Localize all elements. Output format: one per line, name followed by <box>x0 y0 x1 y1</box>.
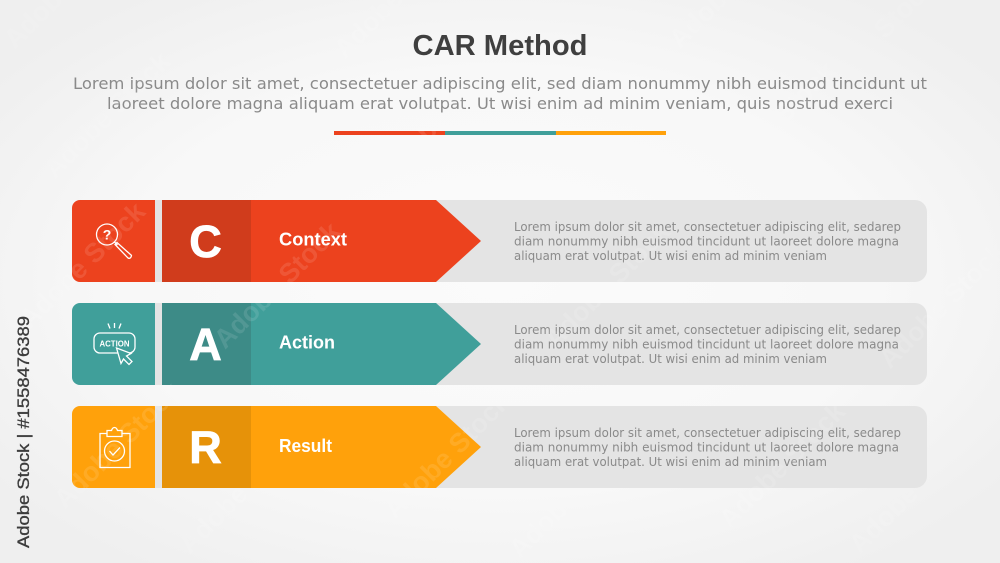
icon: action button with cursor: ACTION <box>100 340 130 348</box>
description: context: aliquam erat volutpat. Ut wisi enim ad minim veniam <box>514 249 827 263</box>
watermark pattern: Adobe <box>503 484 584 563</box>
stock id sidebar text: Adobe Stock | #1558476389 <box>14 316 33 548</box>
letter C: C <box>189 216 222 267</box>
icon: magnifier with question mark: ? <box>103 226 111 242</box>
label: Action: Action <box>279 332 335 352</box>
description background <box>72 303 927 385</box>
label: Context: Context <box>279 230 347 250</box>
panel: action row <box>72 303 927 385</box>
description: context <box>514 220 901 263</box>
watermark pattern: Adobe Stock <box>703 56 842 194</box>
watermark pattern: Adobe Stock <box>373 46 512 184</box>
title: CAR Method <box>412 30 588 62</box>
description background <box>72 200 927 282</box>
icon: action button with cursor <box>94 323 135 364</box>
panel: context row <box>72 200 927 282</box>
letter R: R <box>189 422 222 473</box>
watermark pattern: Adobe Stock <box>538 216 677 354</box>
description background <box>72 406 927 488</box>
icon: clipboard with check <box>100 428 130 468</box>
letter block: A <box>162 303 251 385</box>
subtitle text: Lorem ipsum dolor sit amet, consectetuer adipiscing elit, sed diam nonummy nibh euismod tincidunt ut <box>73 74 927 93</box>
watermark pattern: Adobe <box>843 479 924 559</box>
description: action: Lorem ipsum dolor sit amet, consectetuer adipiscing elit, sedarep <box>514 323 901 337</box>
icon tile: context <box>72 200 155 282</box>
tricolor divider <box>334 131 666 135</box>
watermark pattern: Adobe Stock <box>713 396 852 534</box>
watermark pattern: Adobe Stock <box>13 196 152 334</box>
subtitle text: laoreet dolore magna aliquam erat volutpat. Ut wisi enim ad minim veniam, quis nostrud exerci <box>107 94 893 113</box>
icon: magnifier with question mark <box>96 224 132 258</box>
icon tile: result <box>72 406 155 488</box>
description: result <box>514 426 901 469</box>
icon tile: action <box>72 303 155 385</box>
description: action: aliquam erat volutpat. Ut wisi enim ad minim veniam <box>514 352 827 366</box>
description: context: diam nonummy nibh euismod tincidunt ut laoreet dolore magna <box>514 234 899 248</box>
arrow: result <box>162 406 481 488</box>
description: action <box>514 323 901 366</box>
letter block: C <box>162 200 251 282</box>
watermark pattern: Adobe Stock <box>38 46 177 184</box>
watermark pattern: Adobe Stock <box>378 386 517 524</box>
description: action: diam nonummy nibh euismod tincidunt ut laoreet dolore magna <box>514 338 899 352</box>
watermark pattern: Adobe <box>173 479 254 559</box>
description: result: diam nonummy nibh euismod tincidunt ut laoreet dolore magna <box>514 440 899 454</box>
watermark pattern: Adobe Stock <box>48 376 187 514</box>
label: Result: Result <box>279 436 332 456</box>
watermark pattern: Adobe Stock <box>208 216 347 354</box>
arrow: action <box>162 303 481 385</box>
description: result: aliquam erat volutpat. Ut wisi enim ad minim veniam <box>514 455 827 469</box>
arrow: context <box>162 200 481 282</box>
letter A: A <box>189 319 222 370</box>
description: context: Lorem ipsum dolor sit amet, consectetuer adipiscing elit, sedarep <box>514 220 901 234</box>
subtitle text <box>73 74 927 113</box>
panel: result row <box>72 406 927 488</box>
description: result: Lorem ipsum dolor sit amet, consectetuer adipiscing elit, sedarep <box>514 426 901 440</box>
letter block: R <box>162 406 251 488</box>
